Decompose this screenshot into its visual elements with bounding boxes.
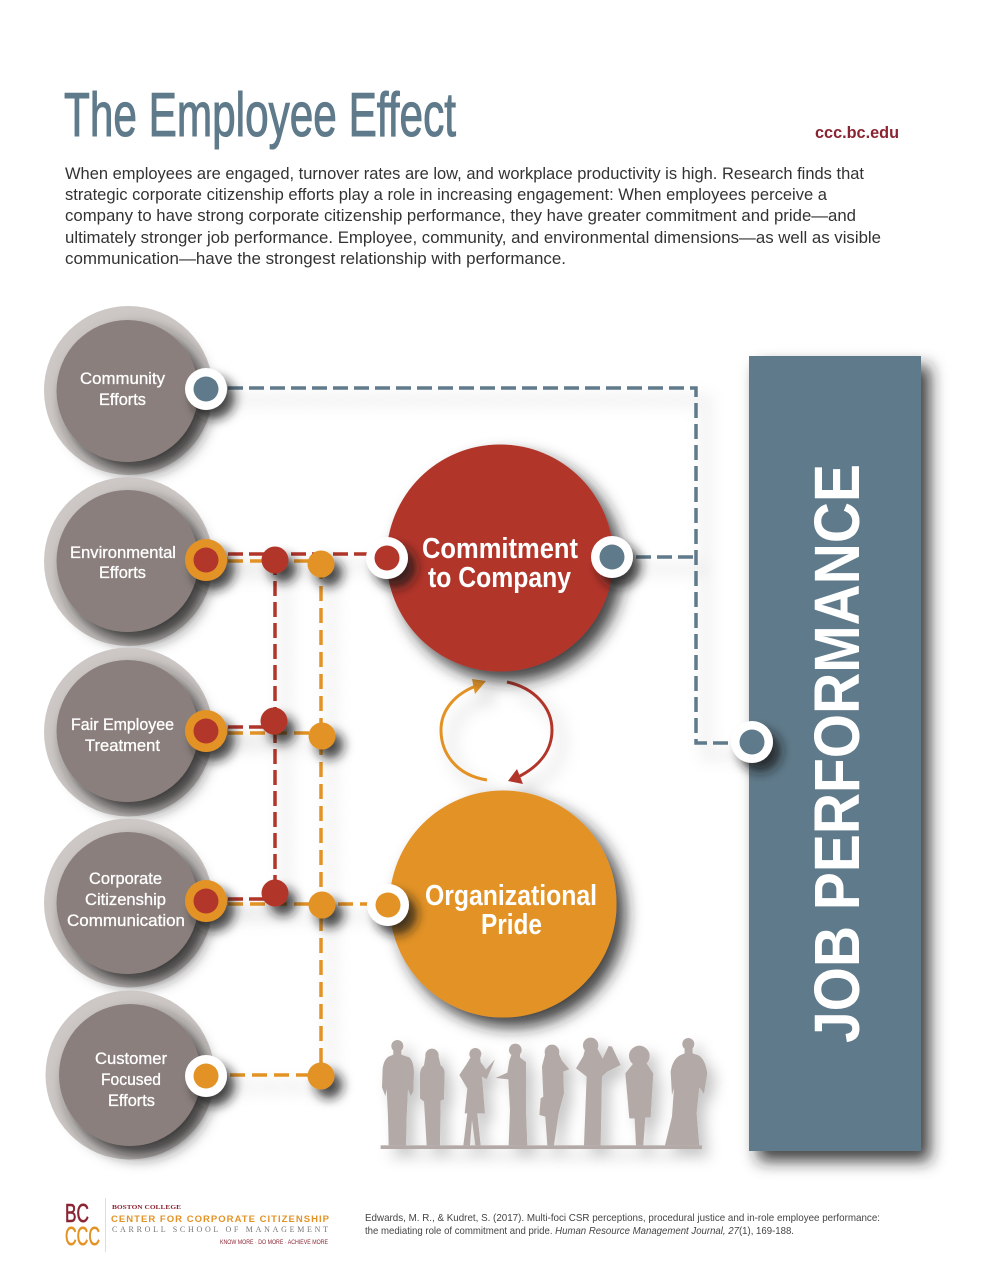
arrow: red cycle arrow [507, 682, 552, 784]
logo: Boston College Center for Corporate Citizenship: CARROLL SCHOOL OF MANAGEMENT [112, 1225, 328, 1234]
label: community efforts: Community [80, 369, 165, 388]
logo: Boston College Center for Corporate Citizenship: BOSTON COLLEGE [112, 1204, 181, 1211]
person 6 [576, 1038, 621, 1145]
node: commitment output [591, 536, 633, 578]
illustration: silhouettes of employees [381, 1038, 707, 1149]
label: customer focused efforts: Efforts [108, 1091, 155, 1110]
panel: corporate citizenship communication [44, 818, 227, 988]
node: customer [185, 1055, 227, 1097]
label: corporate citizenship communication: Citizenship [85, 890, 166, 909]
label: customer focused efforts: Customer [95, 1049, 167, 1068]
label: corporate citizenship communication: Communication [67, 911, 185, 930]
label: fair employee treatment: Fair Employee [71, 715, 174, 734]
label: fair employee treatment: Treatment [85, 736, 160, 755]
logo: Boston College Center for Corporate Citizenship: CENTER FOR CORPORATE CITIZENSHIP [111, 1214, 330, 1225]
panel: fair employee treatment [44, 648, 227, 816]
label: environmental efforts [70, 543, 176, 582]
logo: Boston College Center for Corporate Citizenship: BC [65, 1198, 89, 1228]
panel: organizational pride: Pride [481, 909, 542, 941]
intro paragraph: ultimately stronger job performance. Employee, community, and environmental dimensions—as well as visible [65, 229, 881, 247]
citation: Edwards, M. R., & Kudret, S. (2017). Multi-foci CSR perceptions, procedural justice and in-role employee performance: [365, 1212, 880, 1224]
intro paragraph [65, 165, 881, 268]
connector: red dashed lines [228, 554, 380, 899]
panel: commitment to company: Commitment [422, 533, 578, 565]
citation [365, 1212, 880, 1237]
logo: Boston College Center for Corporate Citizenship: KNOW MORE · DO MORE · ACHIEVE MORE [220, 1240, 328, 1246]
node: community [185, 368, 227, 410]
panel: organizational pride [367, 790, 616, 1018]
label: community efforts: Efforts [99, 390, 146, 409]
person 3 [459, 1048, 495, 1145]
intro paragraph: When employees are engaged, turnover rates are low, and workplace productivity is high. Research finds that [65, 165, 864, 183]
label: environmental efforts: Efforts [99, 563, 146, 582]
node: job performance input [731, 721, 773, 763]
node: commitment input [366, 537, 408, 579]
connector: blue dashed lines to job performance [228, 388, 738, 743]
intro paragraph: strategic corporate citizenship efforts play a role in increasing engagement: When employees perceive a [65, 186, 828, 204]
junction dots: orange [308, 550, 336, 1090]
panel: commitment to company [366, 444, 633, 672]
person 4 [495, 1044, 527, 1145]
website link: ccc.bc.edu [815, 123, 899, 142]
label: customer focused efforts [95, 1049, 167, 1110]
person 7 [625, 1046, 653, 1145]
logo: Boston College Center for Corporate Citizenship: CCC [65, 1221, 100, 1251]
panel: organizational pride: Organizational [425, 880, 597, 912]
panel: job performance bar [749, 356, 921, 1151]
citation: the mediating role of commitment and pride. Human Resource Management Journal, 27(1), 169-188. [365, 1225, 794, 1237]
person 8 [665, 1038, 707, 1145]
label: fair employee treatment [71, 715, 174, 755]
node: environmental [185, 539, 227, 581]
panel: job performance bar: JOB PERFORMANCE [801, 464, 873, 1043]
logo: Boston College Center for Corporate Citizenship [65, 1198, 330, 1252]
label: community efforts [80, 369, 165, 409]
label: corporate citizenship communication [67, 869, 185, 930]
person 5 [539, 1045, 569, 1145]
label: environmental efforts: Environmental [70, 543, 176, 562]
panel: environmental efforts [44, 477, 227, 646]
intro paragraph: communication—have the strongest relationship with performance. [65, 250, 566, 268]
panel: community efforts [44, 306, 227, 475]
panel: commitment to company: to Company [428, 562, 571, 594]
label: customer focused efforts: Focused [101, 1070, 161, 1089]
node: corporate citizenship [185, 880, 227, 922]
node: fair employee [185, 710, 227, 752]
junction dots: red [260, 546, 288, 906]
arrow: orange cycle arrow [441, 679, 487, 780]
panel: customer focused efforts [46, 990, 227, 1160]
node: pride input [367, 884, 409, 926]
person 1 [382, 1040, 414, 1145]
title: The Employee Effect [64, 81, 456, 150]
connector: orange dashed lines [228, 561, 380, 1076]
intro paragraph: company to have strong corporate citizenship performance, they have greater commitment and pride—and [65, 207, 856, 225]
label: corporate citizenship communication: Corporate [89, 869, 162, 888]
person 2 [420, 1049, 445, 1145]
